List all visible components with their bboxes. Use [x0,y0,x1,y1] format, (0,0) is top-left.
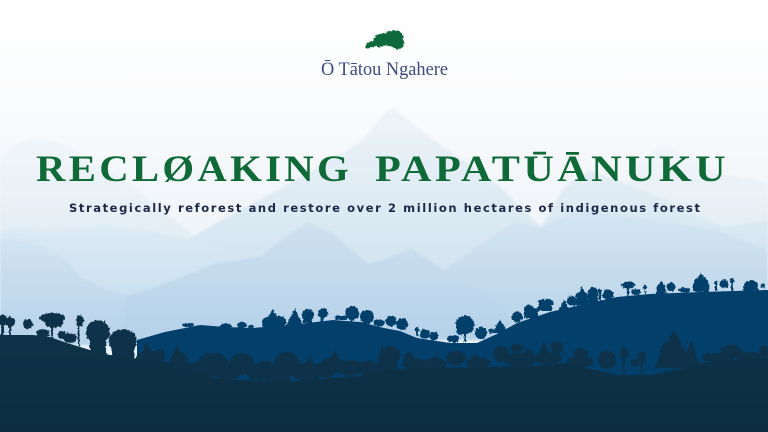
logo icon: green fern [363,30,404,50]
foreground trees [0,313,768,384]
mid right ridge [400,208,768,340]
distant mountain range [0,107,768,345]
title [36,149,729,190]
title: PAPATŪĀNUKU [375,149,729,190]
left lower ridge [0,238,157,345]
logo wordmark: Ō Tātou Ngahere [321,59,448,80]
dark foreground hill [0,313,768,432]
subtitle: Strategically reforest and restore over 2 million hectares of indigenous forest [69,201,701,215]
navy trees [182,273,766,343]
hill shape [137,290,768,400]
navy forested hill [137,273,768,400]
far left and right hills [0,138,768,300]
hill shape [0,335,768,432]
left ridge [0,225,300,340]
title: RECLØAKING [36,149,352,190]
center ridge [125,222,520,340]
logo [321,30,448,80]
central peak [190,107,768,340]
